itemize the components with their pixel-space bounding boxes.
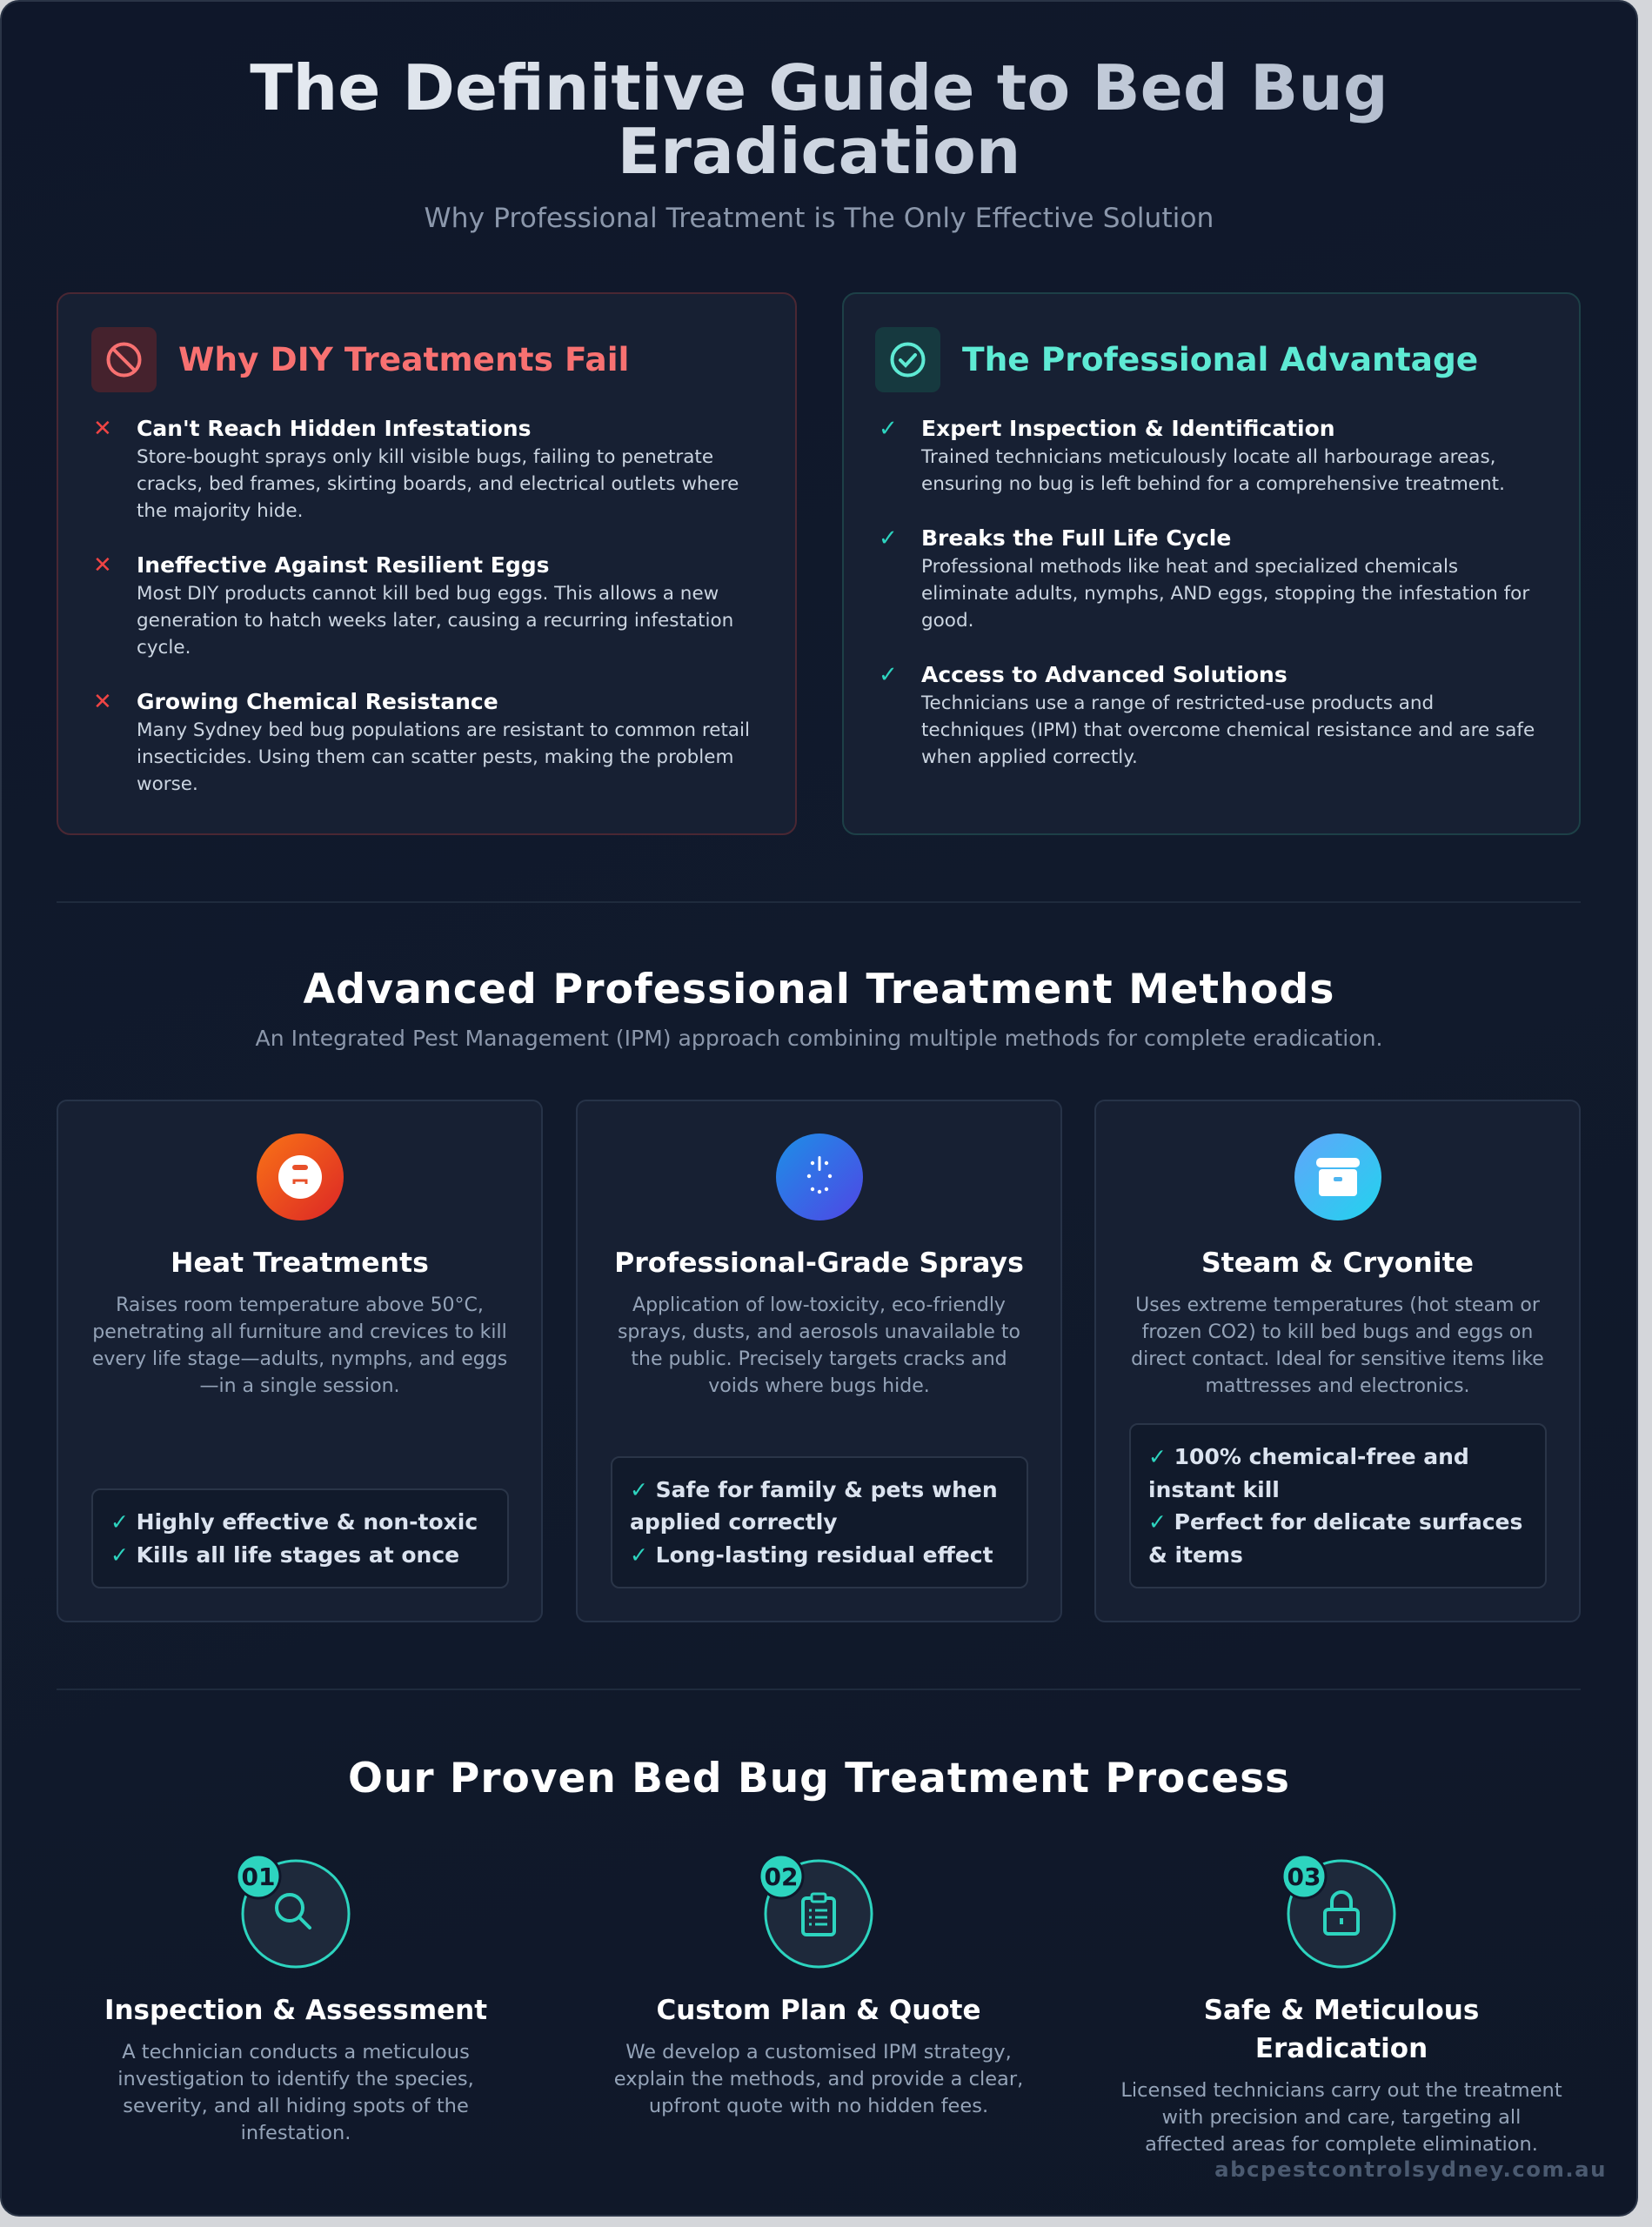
icon: clipboard: [760, 1856, 873, 1968]
title: Eradication: [618, 116, 1020, 189]
icon: steam: [1294, 1134, 1381, 1221]
step text: Licensed technicians carry out the treatment with precision and care, targeting all affected areas for complete elimination.: [1120, 2079, 1562, 2156]
step text: A technician conducts a meticulous investigation to identify the species, severity, and all hiding spots of the infestation.: [117, 2041, 474, 2144]
card: sprays: [576, 1100, 1062, 1622]
step text: Inspection & Assessment: [104, 1995, 487, 2026]
item 3: [879, 662, 1535, 768]
item 3: Technicians use a range of restricted-use products and: [921, 692, 1434, 714]
icon: ban: [91, 327, 157, 392]
title: The Definitive Guide to Bed Bug: [250, 52, 1388, 125]
footer url: abcpestcontrolsydney.com.au: [1214, 2157, 1607, 2182]
item 1: Expert Inspection & Identification: [921, 416, 1335, 441]
methods subtitle: An Integrated Pest Management (IPM) approach combining multiple methods for complete eradication.: [256, 1026, 1382, 1051]
title: Steam & Cryonite: [1201, 1247, 1474, 1279]
checklist: ✓ Safe for family & pets when applied correctly: [630, 1477, 998, 1535]
desc: Uses extreme temperatures (hot steam or frozen CO2) to kill bed bugs and eggs on direct contact. Ideal for sensitive items like mattresses and electronics.: [1131, 1294, 1544, 1397]
checklist: [1129, 1423, 1547, 1588]
icon: heat: [257, 1134, 344, 1221]
icon: check circle: [875, 327, 940, 392]
title: [0, 57, 1638, 184]
checklist: ✓ Perfect for delicate surfaces & items: [1148, 1509, 1522, 1568]
icon: search: 01: [242, 1863, 275, 1891]
icon: lock: 03: [1287, 1863, 1321, 1891]
item 3: Growing Chemical Resistance: [137, 689, 498, 714]
panel: professional advantage: [842, 292, 1581, 835]
item 1: Can't Reach Hidden Infestations: [137, 416, 531, 441]
desc: Raises room temperature above 50°C, penetrating all furniture and crevices to kill every life stage—adults, nymphs, and eggs—in a single session.: [92, 1294, 507, 1397]
item 3: Many Sydney bed bug populations are resistant to common retail insecticides. Using them can scatter pests, making the problem worse.: [137, 719, 750, 795]
step text: [1120, 1995, 1562, 2156]
heading: methods: Advanced Professional Treatment Methods: [303, 966, 1335, 1013]
item 1: ✕: [93, 416, 112, 442]
icon: search: [238, 1856, 350, 1968]
item 2: [879, 525, 1529, 632]
step text: Safe & Meticulous Eradication: [1204, 1995, 1479, 2064]
item 1: Trained technicians meticulously locate all harbourage areas, ensuring no bug is left behind for a comprehensive treatment.: [921, 446, 1505, 495]
step text: We develop a customised IPM strategy, explain the methods, and provide a clear, upfront quote with no hidden fees.: [614, 2041, 1023, 2117]
item 1: [879, 416, 1505, 495]
checklist: ✓ Highly effective & non-toxic: [110, 1509, 478, 1535]
item 3: [93, 689, 750, 795]
item 2: Ineffective Against Resilient Eggs: [137, 552, 550, 578]
item 1: [93, 416, 739, 522]
item 2: Most DIY products cannot kill bed bug eggs. This allows a new generation to hatch weeks later, causing a recurring infestation cycle.: [137, 583, 733, 659]
step text: [614, 1995, 1023, 2117]
desc: Application of low-toxicity, eco-friendly sprays, dusts, and aerosols unavailable to the public. Precisely targets cracks and voids where bugs hide.: [618, 1294, 1020, 1397]
item 2: [93, 552, 733, 659]
heading: The Professional Advantage: [962, 340, 1478, 378]
checklist: ✓ Long-lasting residual effect: [630, 1542, 993, 1568]
title: Heat Treatments: [171, 1247, 429, 1279]
icon: clipboard: 02: [765, 1863, 798, 1891]
item 2: ✕: [93, 552, 112, 578]
step 1: [104, 1856, 487, 2144]
item 2: Breaks the Full Life Cycle: [921, 525, 1231, 551]
title: Professional-Grade Sprays: [614, 1247, 1024, 1279]
panel: why DIY fails: [57, 292, 797, 835]
step text: Custom Plan & Quote: [656, 1995, 981, 2026]
checklist: [91, 1488, 509, 1588]
step 2: [614, 1856, 1023, 2117]
heading: Why DIY Treatments Fail: [178, 340, 629, 378]
item 3: Access to Advanced Solutions: [921, 662, 1287, 687]
step 3: [1120, 1856, 1562, 2156]
subtitle: Why Professional Treatment is The Only Effective Solution: [425, 203, 1214, 234]
item 2: Professional methods like heat and specialized chemicals eliminate adults, nymphs, AND eggs, stopping the infestation for good.: [921, 556, 1529, 632]
checklist: ✓ 100% chemical-free and instant kill: [1148, 1444, 1469, 1501]
heading: process: Our Proven Bed Bug Treatment Process: [348, 1755, 1290, 1802]
icon: spray: [776, 1134, 863, 1221]
step text: [104, 1995, 487, 2144]
checklist: [611, 1456, 1028, 1588]
item 3: techniques (IPM) that overcome chemical resistance and are safe when applied correctly.: [921, 719, 1535, 768]
item 1: ✓: [879, 416, 898, 442]
item 3: ✕: [93, 689, 112, 715]
item 1: Store-bought sprays only kill visible bugs, failing to penetrate cracks, bed frames, skirting boards, and electrical outlets where the majority hide.: [137, 446, 739, 522]
card: steam: [1094, 1100, 1581, 1622]
checklist: ✓ Kills all life stages at once: [110, 1542, 459, 1568]
card: heat: [57, 1100, 543, 1622]
icon: lock: [1284, 1856, 1395, 1968]
item 3: ✓: [879, 662, 898, 688]
item 2: ✓: [879, 525, 898, 552]
